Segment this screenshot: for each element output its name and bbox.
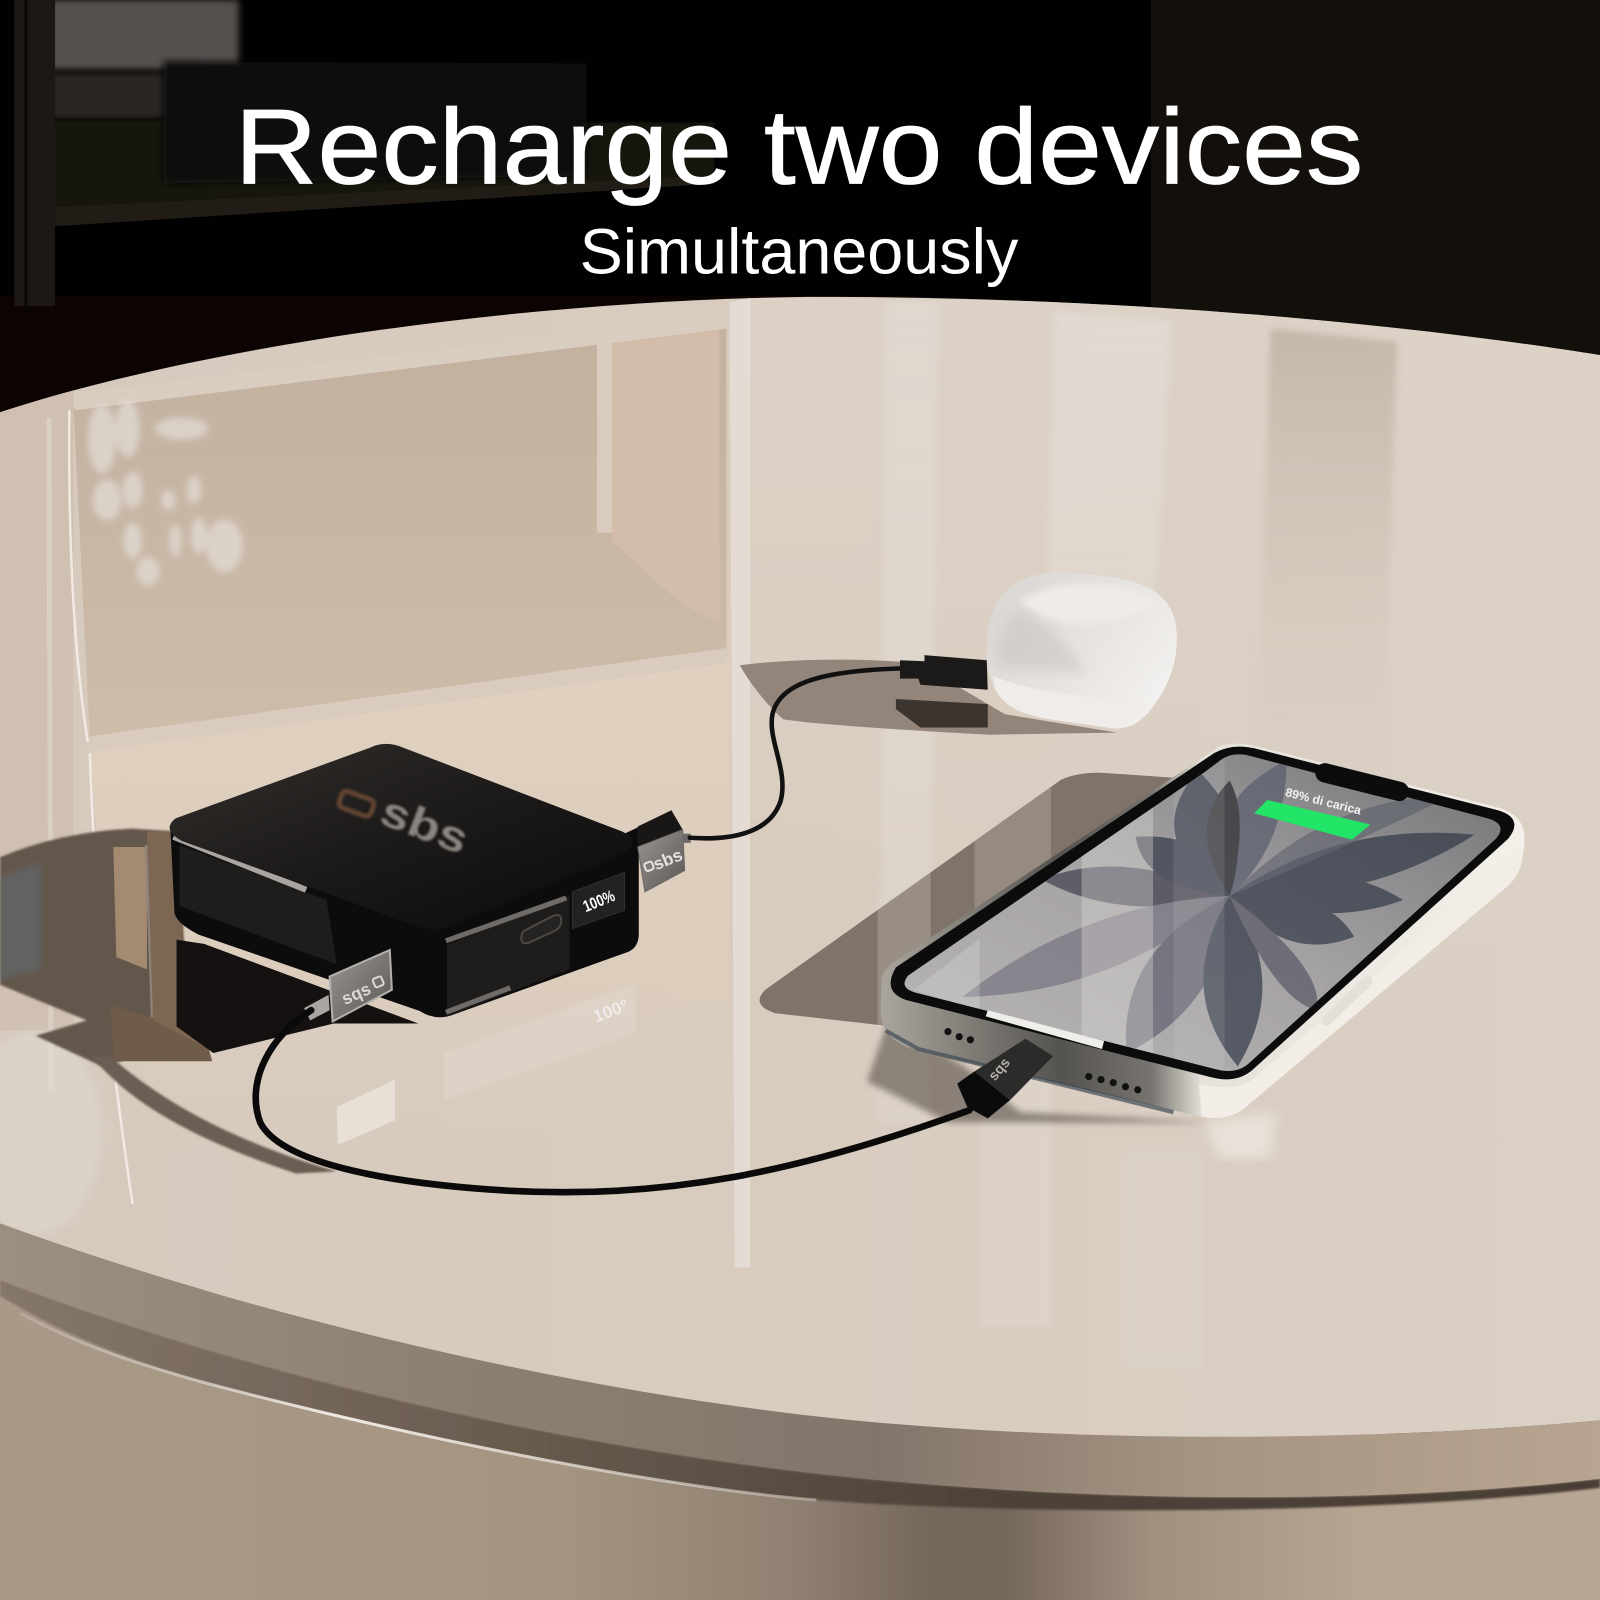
lid top highlight <box>1020 584 1158 624</box>
white frame edge <box>1199 845 1524 1118</box>
phone body <box>881 744 1525 1118</box>
reflected display value: 100° <box>590 995 631 1026</box>
ribbed side texture <box>447 896 569 1016</box>
lid seam and base <box>993 676 1148 728</box>
digital display <box>572 872 624 929</box>
dynamic island <box>1313 761 1411 803</box>
carbon side texture <box>180 845 337 964</box>
rim highlight line <box>20 1313 816 1500</box>
phone side buttons <box>1327 982 1367 1020</box>
lower screen reflection <box>986 1010 1104 1049</box>
cable to earbuds case <box>690 668 903 838</box>
glass frame vertical bar <box>730 298 750 1267</box>
right connector <box>638 810 691 892</box>
left connector: sqs <box>338 978 374 1009</box>
cable plug in case <box>900 655 988 690</box>
right connector: sbs <box>650 844 685 874</box>
silver rim highlights <box>173 837 306 890</box>
phone cable plug <box>957 1039 1053 1118</box>
left connector <box>304 950 392 1021</box>
charge status text: 89% di carica <box>1284 785 1363 818</box>
speaker grille dots <box>944 1028 1141 1093</box>
power bank side walls <box>171 829 638 1016</box>
light stripes across the screen <box>1082 808 1153 1054</box>
earbuds case <box>900 573 1177 728</box>
phone glare reflection <box>1204 1112 1276 1158</box>
tree reflection blotches <box>88 400 243 586</box>
table side below the rim <box>0 1265 1600 1600</box>
lower edge tint <box>886 1031 1173 1112</box>
smartphone <box>881 744 1525 1118</box>
soft window glare at lower left <box>0 1031 102 1235</box>
USB-C port <box>521 915 561 943</box>
lid shadow <box>995 612 1087 673</box>
title: Recharge two devices <box>235 87 1363 207</box>
reflections on the table surface <box>0 296 1600 1367</box>
table top surface <box>0 297 1600 1437</box>
subtitle: Simultaneously <box>580 215 1018 287</box>
black screen bezel <box>891 747 1514 1079</box>
power bank <box>170 744 691 1021</box>
groove shadow under the rim <box>0 1280 1600 1510</box>
flower petals <box>962 760 1474 1066</box>
power bank top face <box>170 744 632 929</box>
shadows on the table <box>0 660 1276 1173</box>
battery bar <box>1254 800 1370 840</box>
logo on top <box>338 787 475 864</box>
shadow behind phone <box>760 773 1214 1026</box>
cable shadow under phone <box>867 1020 1214 1122</box>
charger reflection <box>444 983 636 1100</box>
screen wallpaper <box>904 754 1500 1071</box>
logo on top: sbs <box>374 787 475 864</box>
light bands over phone shadow <box>878 787 1051 1026</box>
cable to phone <box>256 1010 969 1192</box>
phone cable plug: sqs <box>986 1055 1014 1084</box>
shadow behind earbuds case <box>740 660 1117 735</box>
table rim band <box>0 1223 1600 1497</box>
battery percentage: 100% <box>580 887 618 916</box>
